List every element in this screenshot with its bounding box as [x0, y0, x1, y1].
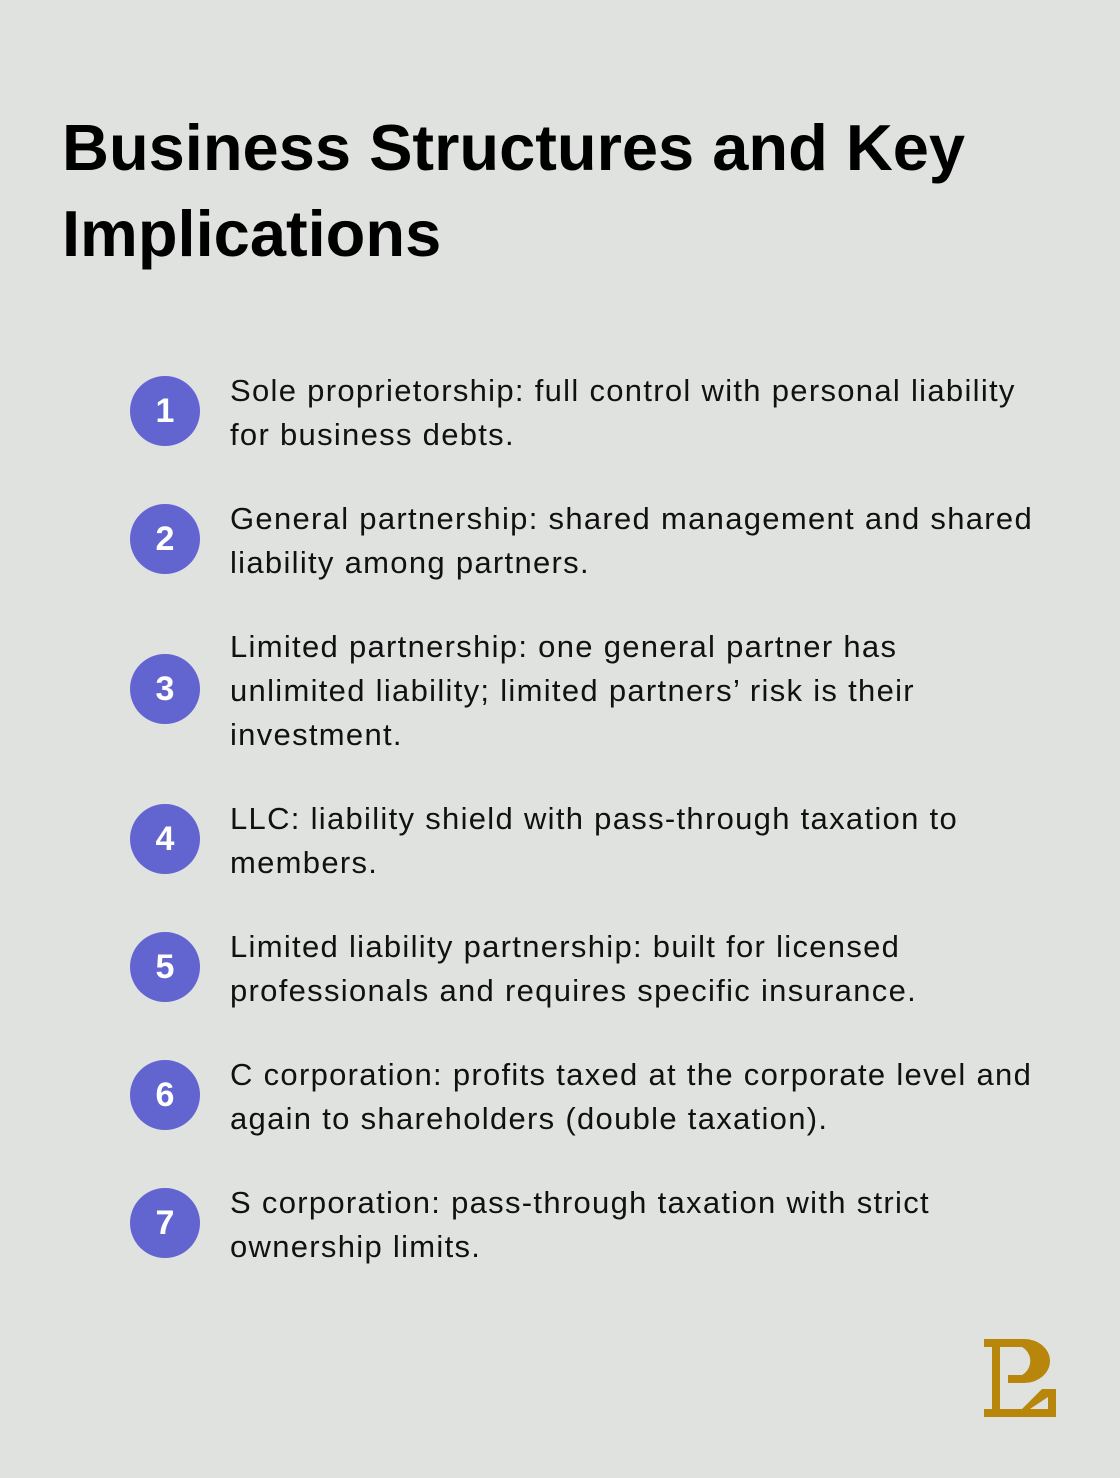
item 1: for business debts.: [230, 417, 515, 452]
title: Business Structures and Key: [62, 111, 965, 184]
item 4: LLC: liability shield with pass-through taxation to: [230, 801, 958, 836]
item 6: 6: [156, 1076, 174, 1114]
item 2: [130, 501, 1033, 580]
item 5: professionals and requires specific insurance.: [230, 973, 917, 1008]
item 3: 3: [156, 670, 174, 708]
item 2: General partnership: shared management and shared: [230, 501, 1033, 536]
item 4: 4: [156, 820, 174, 858]
title: Implications: [62, 197, 441, 270]
item 7: ownership limits.: [230, 1229, 481, 1264]
item 7: S corporation: pass-through taxation with strict: [230, 1185, 930, 1220]
item 6: [130, 1057, 1032, 1136]
item 7: [130, 1185, 930, 1264]
logo: [984, 1339, 1056, 1417]
item 6: C corporation: profits taxed at the corporate level and: [230, 1057, 1032, 1092]
item 7: 7: [156, 1204, 174, 1242]
item 3: investment.: [230, 717, 403, 752]
item 1: [130, 373, 1016, 452]
title: [62, 111, 965, 270]
item 1: Sole proprietorship: full control with personal liability: [230, 373, 1016, 408]
item 6: again to shareholders (double taxation).: [230, 1101, 828, 1136]
item 3: unlimited liability; limited partners’ risk is their: [230, 673, 915, 708]
item 5: Limited liability partnership: built for licensed: [230, 929, 900, 964]
item 5: 5: [156, 948, 174, 986]
item 5: [130, 929, 917, 1008]
item 1: 1: [156, 392, 174, 430]
item 3: Limited partnership: one general partner has: [230, 629, 897, 664]
item 3: [130, 629, 915, 752]
item 2: liability among partners.: [230, 545, 590, 580]
item 2: 2: [156, 520, 174, 558]
item 4: [130, 801, 958, 880]
item 4: members.: [230, 845, 378, 880]
